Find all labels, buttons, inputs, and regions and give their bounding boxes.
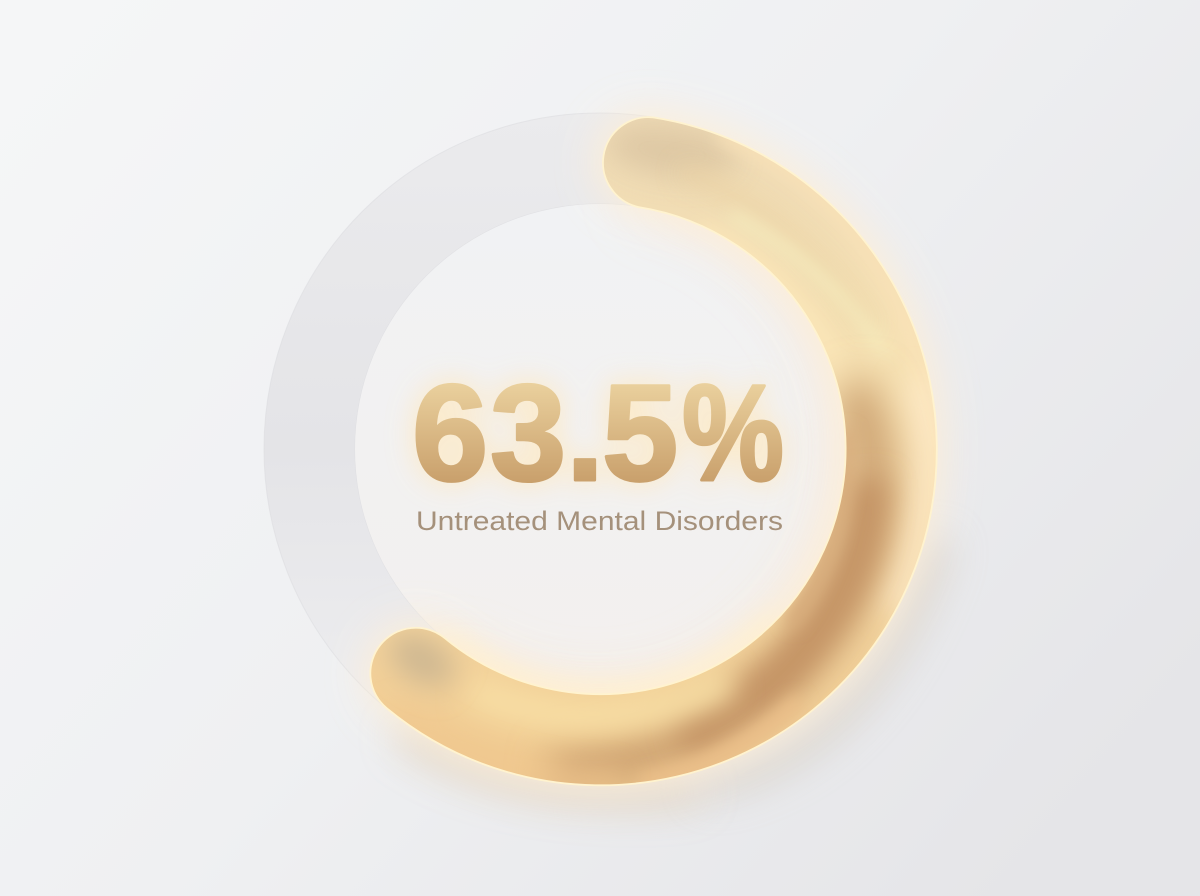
- outer right rim light: [890, 380, 925, 610]
- gold progress arc: [370, 117, 937, 785]
- big number glow: %: [682, 357, 784, 510]
- panel: inner disc: [355, 204, 816, 694]
- band shading above streak: [680, 170, 870, 330]
- tan shading on top cap: [612, 123, 732, 180]
- caption: Untreated Mental Disorders: [416, 506, 783, 536]
- big number: 63.5%: .: [566, 357, 604, 510]
- big number: 63.5%: 6: [412, 357, 488, 510]
- big number: 63.5%: %: [682, 357, 784, 510]
- big number: 63.5%: 5: [602, 357, 678, 510]
- big number glow: .: [566, 357, 604, 510]
- inner edge warmth: [700, 228, 845, 400]
- big number glow: 6: [412, 357, 488, 510]
- fold core: [680, 480, 868, 738]
- outer lower edge warmth: [658, 700, 792, 775]
- donut chart: 63.5%: [264, 113, 940, 793]
- outer edge warmth: [728, 140, 742, 148]
- tan shading on bottom cap: [384, 629, 460, 694]
- dark fold band: [550, 385, 873, 775]
- big number glow: 5: [602, 357, 678, 510]
- light lower belly: [470, 680, 730, 717]
- outer lower left warmth: [554, 766, 612, 784]
- pale highlight streak: [743, 220, 865, 324]
- big number: 63.5%: 3: [490, 357, 566, 510]
- inner tan edge on the fold: [790, 430, 846, 625]
- big number glow: 3: [490, 357, 566, 510]
- panel: grey ring track: [264, 113, 936, 785]
- bright rim line: [370, 117, 937, 785]
- arc shadow and glow: [400, 162, 940, 793]
